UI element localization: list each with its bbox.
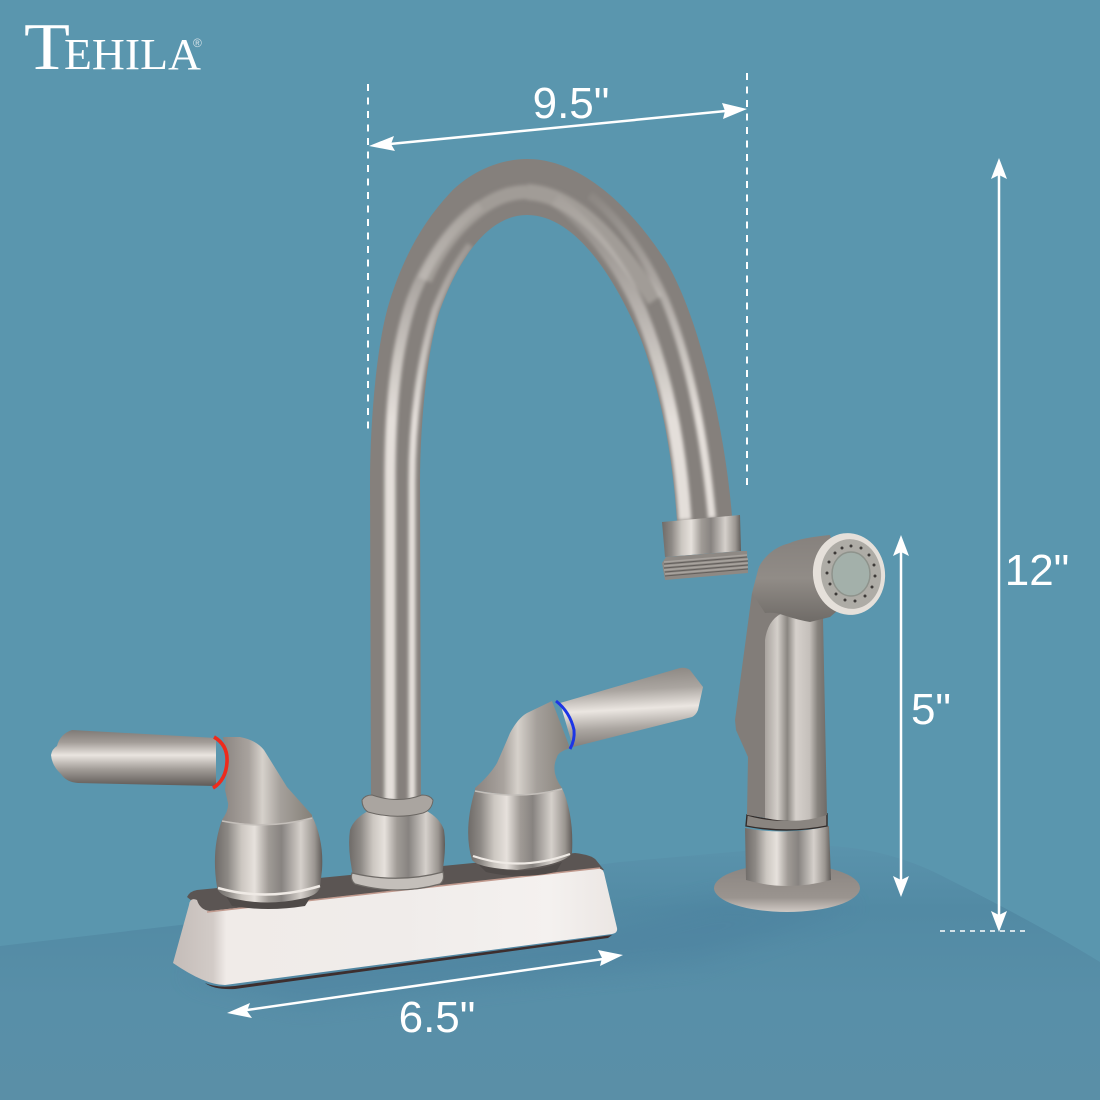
pillar [349,795,445,890]
dimension: 5 inch [893,535,951,897]
base shadow [180,900,860,1005]
sprayer disk [714,864,860,912]
dimension: 5 inch: 5" [911,685,951,734]
left foot [226,895,312,909]
left neck [222,737,312,825]
left body [215,816,322,902]
dimension: 9.5 inch [368,73,747,488]
sprayer side panel [735,593,785,818]
dimension: 6.5 inch [227,950,623,1042]
right handle [468,668,703,876]
logo [24,10,202,84]
faucet spout [370,159,732,799]
faucet [51,150,750,989]
logo: EHILA [64,30,201,79]
logo: ® [193,36,202,50]
countertop surface [0,846,1100,1100]
sprayer body [765,613,827,821]
base plate [173,853,617,989]
dimension: 12 inch [940,158,1069,932]
blue ring [556,701,574,749]
left lever [51,730,216,786]
sprayer collar [745,826,831,886]
dimension: 12 inch: 12" [1005,546,1069,595]
dimension: 9.5 inch: 9.5" [533,79,609,128]
right foot [478,862,562,876]
dimension: 6.5 inch: 6.5" [399,993,475,1042]
left handle [51,730,322,909]
spout thread [662,551,748,580]
right neck [475,701,570,795]
sprayer rings [746,814,827,830]
red ring [213,737,227,788]
spout collar [662,515,741,557]
right lever [560,668,703,747]
sprayer face [808,528,890,620]
logo: T [24,10,70,84]
right body [468,788,572,870]
sprayer head [752,535,850,622]
side sprayer [714,528,890,912]
